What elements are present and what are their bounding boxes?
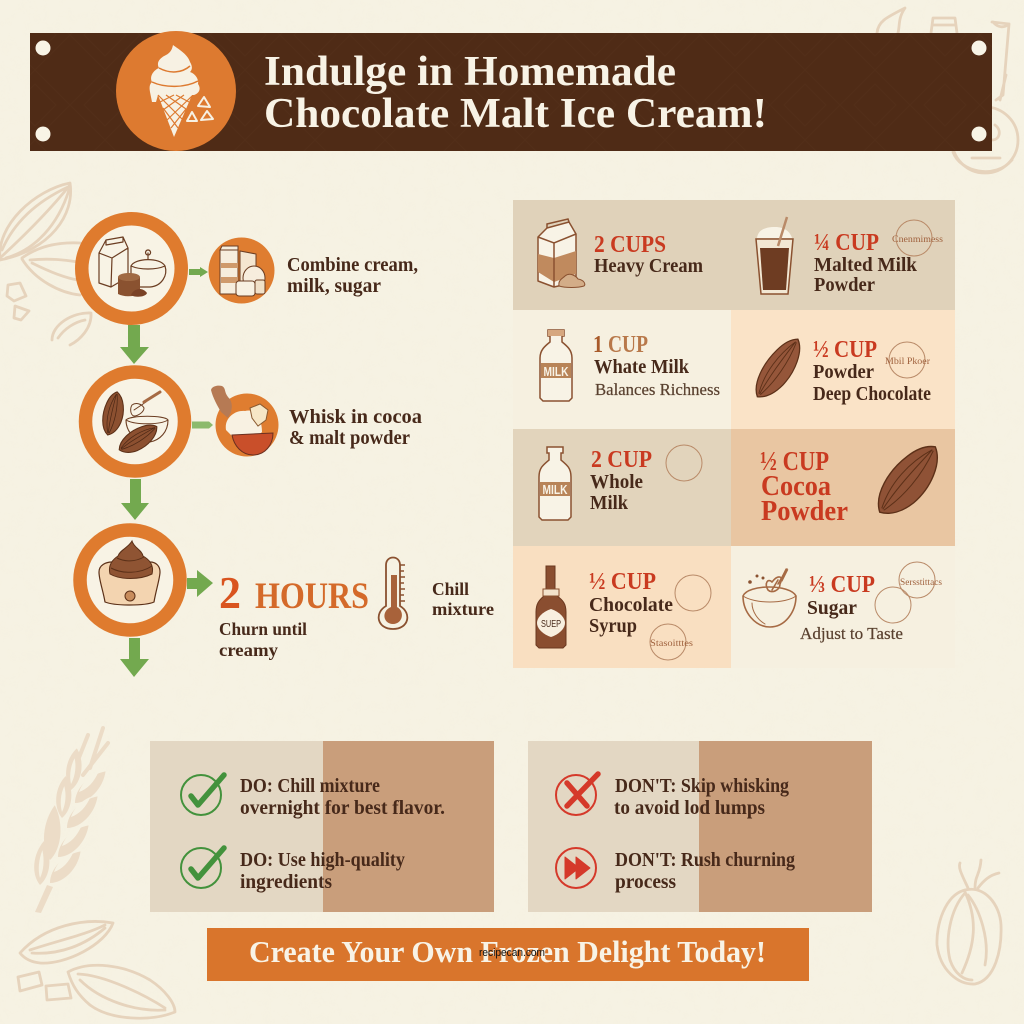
step 2 text: & malt powder [289,428,410,449]
header banner [30,31,992,151]
step 1 text: milk, sugar [287,276,381,297]
cell: chocolate syrup [536,566,711,660]
cell: whole milk: Whole [590,472,643,493]
step 1 text: Combine cream, [287,255,418,276]
cell: white milk: 1 [593,331,603,358]
panel: don't tips [528,741,872,912]
arrow down 3 [120,638,149,677]
step 1 text [287,255,418,297]
binder holes [36,40,986,142]
2 hours value [219,567,369,618]
churn text: Churn until [219,619,307,639]
cell: heavy cream: 2 CUPS [594,231,666,258]
do text 1: DO: Chill mixture [240,776,380,797]
decorative cocoa beans top left [0,183,91,345]
cell: sugar: Adjust to Taste [800,624,903,643]
do text 2 [240,850,405,893]
cell: chocolate syrup: ½ CUP [589,568,656,595]
decorative wheat stalk [33,728,111,913]
icon: check [181,848,224,888]
icon: fast forward [556,848,596,888]
cell: chocolate syrup: Stasoitttes [650,639,693,649]
cell: whole milk: 2 CUP [591,446,652,473]
icon: cross [556,774,598,815]
cell: powder deep chocolate [746,333,931,405]
cell: cocoa powder: Cocoa [761,470,831,502]
icon: thermometer [379,558,407,629]
decorative kitchen tools top right [877,8,1018,173]
step 1 ring icon: carton, pot, jar [82,219,181,318]
ice cream badge [116,31,236,151]
cell: white milk: Whate Milk [594,357,689,378]
cell: heavy cream: Heavy Cream [594,256,703,277]
step 2 ring icon: beans and whisk [86,372,184,471]
chill text [432,579,494,619]
cell: sugar: ⅓ CUP [809,571,875,598]
cell: white milk [540,330,720,401]
decorative cocoa pod bottom right [937,860,1001,984]
do text 1: overnight for best flavor. [240,798,445,819]
cell: chocolate syrup: SUEP [541,619,561,630]
2 hours value: 2 [219,567,241,618]
cell: sugar: Sersstittacs [900,578,942,588]
cell: white milk: CUP [608,331,648,358]
arrow down 2 [121,479,149,520]
cell: sugar [743,562,942,643]
don't text 1: to avoid lod lumps [614,798,765,819]
don't text 2: DON'T: Rush churning [615,850,795,871]
cell: powder deep chocolate: ½ CUP [813,336,877,363]
chill text: Chill [432,579,469,599]
step 3 ring icon: churn bowl [80,530,180,630]
do text 2: ingredients [240,872,332,893]
cell: whole milk: MILK [542,482,568,497]
cell: malted milk powder: Cnenmimess [892,235,943,245]
don't text 1: DON'T: Skip whisking [615,776,789,797]
cell: sugar: Sugar [807,598,857,619]
arrow right [192,422,213,428]
cell: malted milk powder: Powder [814,275,875,296]
title: Chocolate Malt Ice Cream! [264,91,767,137]
cell: cocoa powder [760,437,953,527]
step 2 text: Whisk in cocoa [289,407,422,428]
cell: whole milk: Milk [590,493,628,514]
step 2 text [289,407,422,449]
cell: heavy cream [538,219,703,288]
call to action banner: Create Your Own Frozen Delight Today! [249,934,766,969]
panel: do tips [150,741,494,912]
cell: cocoa powder: Powder [761,495,848,527]
cell: whole milk [539,445,702,520]
don't text 1 [614,776,789,819]
cell: chocolate syrup: Chocolate [589,595,673,616]
cell: white milk: Balances Richness [595,380,720,399]
cell: chocolate syrup: Syrup [589,616,637,637]
step 1 [82,219,418,318]
cell: powder deep chocolate: Powder [813,362,874,383]
watermark: recipecan.com [479,947,545,959]
title: Indulge in Homemade [264,49,676,95]
title [264,49,767,137]
step 2 ingredient badge [211,386,278,456]
icon: check [181,775,224,815]
do text 1 [240,776,445,819]
don't text 2: process [615,872,676,893]
cell: cocoa powder: ½ CUP [760,446,829,476]
churn text [219,619,307,660]
step 2 [86,372,422,471]
panel: ingredient grid [513,200,955,668]
don't text 2 [615,850,795,893]
chill text: mixture [432,599,494,619]
step 3 [80,530,494,660]
cell: malted milk powder [756,217,943,296]
do text 2: DO: Use high-quality [240,850,405,871]
decorative cocoa beans bottom left [18,922,175,1018]
churn text: creamy [219,640,278,660]
cell: malted milk powder: Malted Milk [814,255,917,276]
cell: malted milk powder: ¼ CUP [814,229,879,256]
call to action banner [207,928,809,981]
arrow down 1 [120,325,149,364]
2 hours value: HOURS [255,576,369,617]
arrow right [189,267,208,277]
cell: powder deep chocolate: Mbil Pkoer [885,357,931,367]
step 1 ingredient badge [208,238,274,304]
cell: white milk: MILK [544,364,569,379]
cell: powder deep chocolate: Deep Chocolate [813,384,931,405]
arrow right [187,570,213,597]
